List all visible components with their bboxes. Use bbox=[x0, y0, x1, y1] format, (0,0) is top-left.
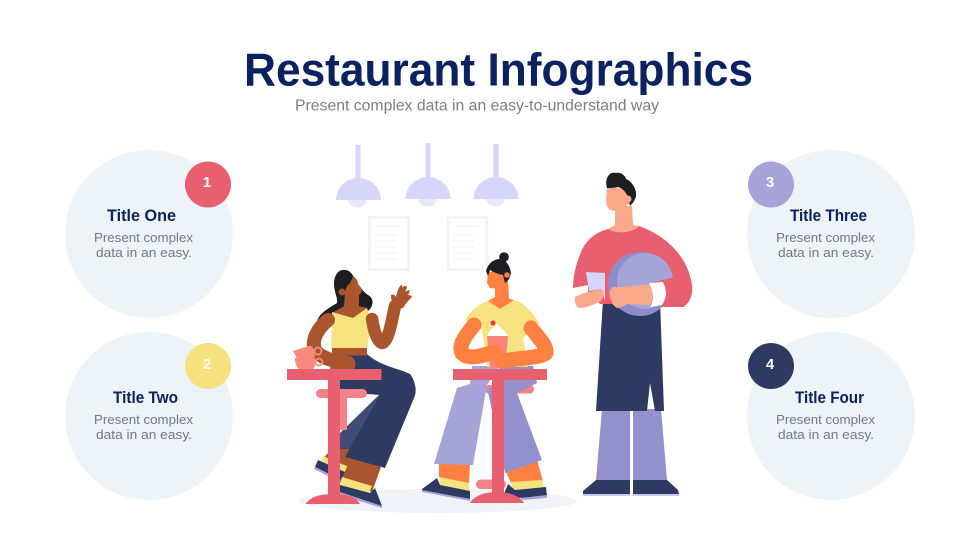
panel: title four: 4 bbox=[766, 356, 775, 373]
legs bbox=[596, 409, 630, 480]
panel: title two: data in an easy. bbox=[96, 427, 192, 442]
stool and table right bbox=[453, 369, 547, 503]
panel: title three bbox=[747, 150, 915, 318]
neck bbox=[488, 280, 514, 309]
panel: title four bbox=[747, 332, 915, 500]
left cuff and hand bbox=[573, 285, 588, 298]
face bbox=[346, 276, 362, 296]
panel: title two: 2 bbox=[203, 356, 211, 373]
arms of seated woman right bbox=[461, 325, 546, 361]
panel: title two: Title Two bbox=[113, 389, 178, 407]
front leg bbox=[340, 456, 381, 492]
seated woman left bbox=[314, 270, 416, 508]
panel: title three: Present complex bbox=[776, 230, 876, 245]
right arm bbox=[372, 306, 395, 343]
panel: title four: data in an easy. bbox=[778, 427, 874, 442]
hair bbox=[316, 270, 372, 325]
panel: title one: Title One bbox=[107, 207, 176, 225]
pants bbox=[332, 354, 416, 468]
face bbox=[487, 270, 506, 288]
panel: title four: Title Four bbox=[795, 389, 865, 407]
stool and table left bbox=[287, 369, 382, 504]
subtitle: Present complex data in an easy-to-understand way bbox=[295, 98, 659, 114]
icon: hanging lamps bbox=[336, 143, 518, 208]
floor shadow bbox=[299, 489, 577, 513]
panel: title one bbox=[65, 150, 233, 318]
panel: title three: Title Three bbox=[790, 207, 867, 225]
holding arm bbox=[610, 284, 653, 308]
panel: title one: data in an easy. bbox=[96, 245, 192, 260]
tray bbox=[608, 252, 672, 316]
face bbox=[606, 186, 630, 211]
shirt bbox=[465, 300, 539, 367]
sleeve over tray bbox=[650, 270, 692, 307]
menu card bbox=[586, 272, 605, 301]
panel: title three: data in an easy. bbox=[778, 245, 874, 260]
raised hand bbox=[391, 285, 412, 309]
hair bbox=[606, 173, 636, 206]
neck and chest bbox=[332, 292, 367, 319]
panel: title two bbox=[65, 332, 233, 500]
seated woman right bbox=[422, 252, 547, 501]
panel: title three: 3 bbox=[766, 174, 774, 191]
title: Restaurant Infographics bbox=[244, 44, 753, 96]
panel: title four: Present complex bbox=[776, 412, 876, 427]
apron bbox=[596, 300, 664, 411]
shoes bbox=[583, 480, 630, 494]
left arm bbox=[314, 320, 348, 363]
panel: title one: Present complex bbox=[94, 230, 194, 245]
stool seat behind bbox=[485, 385, 534, 394]
cuff bbox=[649, 282, 666, 307]
icon: coffee cups bbox=[293, 346, 322, 369]
socks bbox=[439, 477, 469, 491]
torso top bbox=[331, 308, 371, 348]
midriff bbox=[332, 347, 367, 356]
panel: title two: Present complex bbox=[94, 412, 194, 427]
standing waiter bbox=[573, 173, 692, 496]
back leg bbox=[322, 443, 352, 470]
trousers bbox=[488, 366, 542, 473]
ankles bbox=[439, 463, 470, 484]
hair bbox=[486, 259, 511, 283]
panel: title one: 1 bbox=[203, 174, 211, 191]
shoes bbox=[422, 478, 470, 499]
neck bbox=[608, 206, 639, 232]
sweater bbox=[573, 226, 692, 307]
icon: wall menus bbox=[370, 218, 487, 270]
icon: milkshake bbox=[487, 320, 508, 368]
